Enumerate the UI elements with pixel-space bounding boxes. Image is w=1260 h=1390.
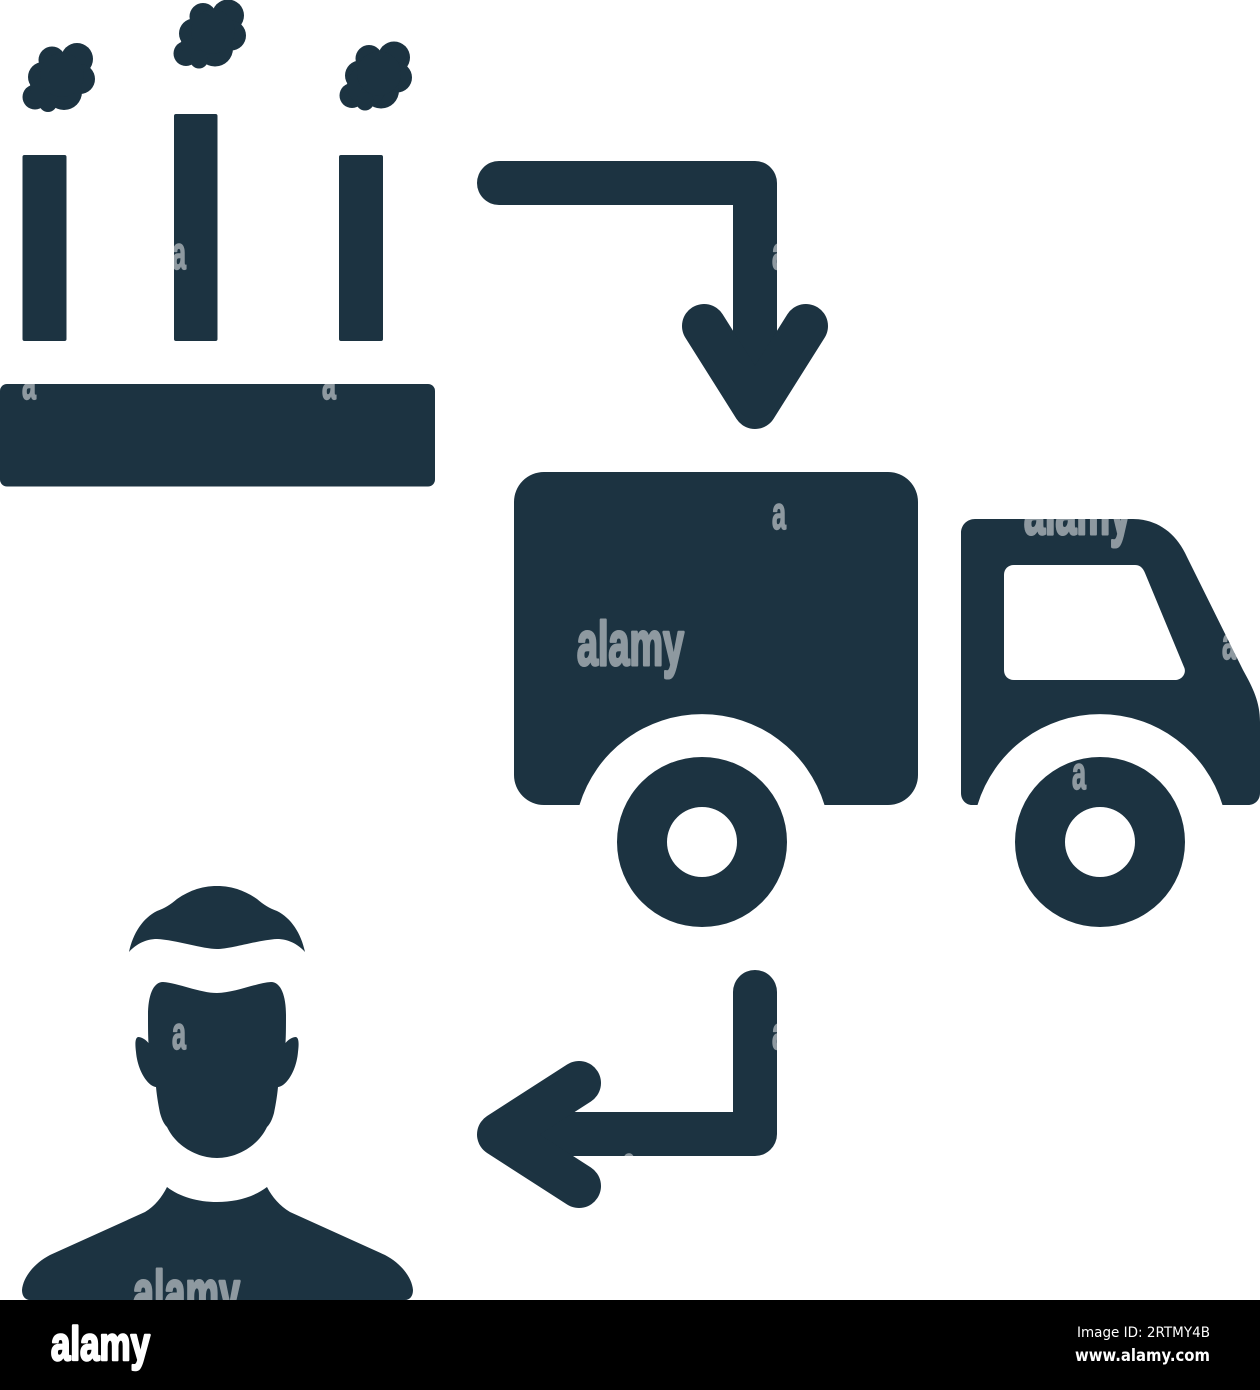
watermark pattern: a: [772, 227, 786, 279]
watermark pattern: a: [622, 1137, 636, 1189]
watermark pattern: a: [1072, 747, 1086, 799]
watermark pattern: alamy: [577, 610, 684, 679]
icon: right smoke cloud: [340, 42, 412, 110]
image id: Image ID: 2RTMY4B: [1077, 1325, 1210, 1341]
footer logo: alamy: [51, 1317, 150, 1370]
person head: [135, 982, 299, 1158]
watermark pattern: a: [172, 227, 186, 279]
icon: delivery truck: [514, 472, 1260, 927]
watermark pattern: a: [1222, 617, 1236, 669]
truck cargo box: [514, 472, 918, 805]
footer bar: [0, 1300, 1260, 1390]
icon: middle smoke cloud: [174, 0, 246, 68]
icon: left smoke cloud: [22, 43, 95, 112]
icon: middle chimney: [174, 114, 218, 341]
arrow: factory to truck: [499, 183, 806, 407]
watermark pattern: a: [322, 357, 336, 409]
website address: www.alamy.com: [1075, 1346, 1210, 1366]
icon: person: [22, 886, 413, 1300]
icon: left chimney: [22, 155, 66, 341]
icon: factory base: [0, 384, 435, 486]
watermark pattern: alamy: [133, 1259, 240, 1328]
person shoulders: [22, 1187, 413, 1300]
watermark pattern: alamy: [1024, 479, 1131, 548]
icon: factory: [0, 0, 435, 486]
arrow: truck to person: [499, 992, 755, 1186]
watermark pattern: [22, 227, 1236, 1328]
person hair: [129, 886, 305, 952]
icon: right chimney: [339, 155, 383, 341]
truck front wheel: [1015, 757, 1185, 927]
watermark pattern: a: [22, 357, 36, 409]
watermark pattern: a: [772, 487, 786, 539]
truck rear wheel: [617, 757, 787, 927]
watermark pattern: a: [172, 1007, 186, 1059]
truck cab with window: [961, 519, 1260, 805]
watermark pattern: a: [772, 1007, 786, 1059]
